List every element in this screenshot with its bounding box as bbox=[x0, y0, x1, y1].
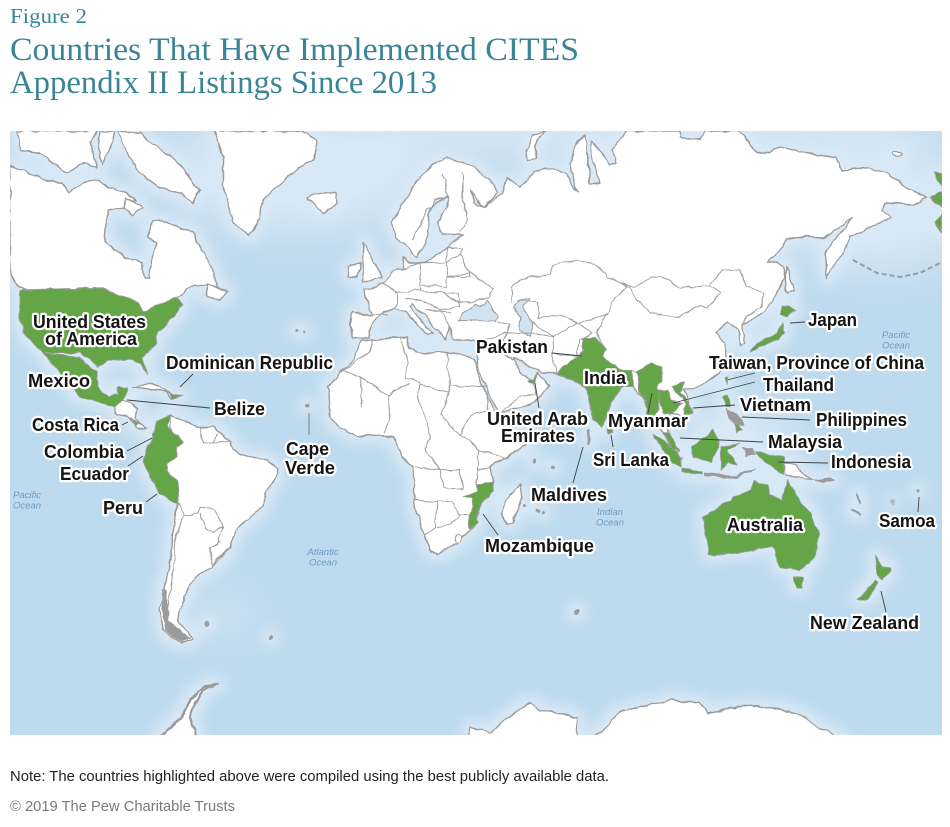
title block bbox=[10, 4, 579, 101]
Vietnam bbox=[672, 383, 692, 416]
Japan bbox=[780, 305, 795, 317]
Caspian Sea bbox=[513, 298, 533, 337]
label: Australia: Australia bbox=[727, 514, 804, 535]
label: United States of America: United States bbox=[33, 311, 146, 332]
Central America bbox=[113, 400, 147, 428]
label: Pakistan: Pakistan bbox=[476, 336, 548, 357]
title line two: Appendix II Listings Since 2013 bbox=[10, 65, 437, 101]
Indian Ocean: Indian bbox=[597, 507, 623, 518]
label: Emirates: Emirates bbox=[501, 425, 575, 446]
Greenland bbox=[215, 131, 317, 235]
label: Mozambique: Mozambique bbox=[485, 535, 594, 556]
leader lines bbox=[122, 322, 919, 612]
Mozambique bbox=[463, 482, 494, 528]
label: Dominican Republic: Dominican Republic bbox=[166, 352, 333, 373]
label: India: India bbox=[584, 367, 627, 388]
label: Philippines: Philippines bbox=[816, 409, 907, 430]
label: Costa Rica: Costa Rica bbox=[32, 414, 120, 435]
South America bbox=[144, 415, 277, 643]
country borders bbox=[167, 173, 765, 610]
Caribbean islands bbox=[133, 383, 170, 392]
label: Mexico: Mexico bbox=[28, 370, 90, 391]
Dominican Republic bbox=[170, 393, 182, 398]
label: Verde: Verde bbox=[285, 457, 335, 478]
Africa bbox=[328, 337, 530, 555]
label: Belize: Belize bbox=[214, 398, 265, 419]
Myanmar bbox=[637, 363, 662, 420]
Papua New Guinea bbox=[783, 462, 812, 480]
Far-side Pacific highlights bbox=[933, 173, 942, 185]
label: Indonesia: Indonesia bbox=[831, 451, 912, 472]
Thailand bbox=[658, 390, 682, 413]
Colombia, Ecuador and Peru bbox=[144, 415, 183, 503]
Philippines bbox=[723, 395, 730, 407]
land: uncoloured countries bbox=[10, 131, 927, 742]
Antarctica bbox=[590, 700, 845, 742]
label: Myanmar: Myanmar bbox=[608, 410, 688, 431]
Pacific Ocean west: Ocean bbox=[13, 500, 41, 512]
UK and Ireland bbox=[362, 243, 382, 283]
Novaya Zemlya bbox=[527, 131, 545, 160]
Aleutian Islands bbox=[853, 260, 942, 277]
label: Vietnam: Vietnam bbox=[740, 394, 811, 415]
label: Ecuador: Ecuador bbox=[60, 463, 129, 484]
label: of America: of America bbox=[45, 328, 138, 349]
land and countries bbox=[10, 131, 942, 742]
Eurasia bbox=[350, 131, 927, 452]
label: Colombia: Colombia bbox=[44, 441, 125, 462]
Madagascar bbox=[502, 485, 522, 525]
Canada and Alaska bbox=[10, 166, 217, 313]
United Arab Emirates bbox=[527, 374, 538, 384]
Black Sea bbox=[458, 300, 497, 322]
world map bbox=[10, 105, 950, 742]
Australia bbox=[703, 480, 820, 570]
Costa Rica bbox=[130, 418, 140, 425]
Arctic islands bbox=[118, 131, 200, 203]
Iceland bbox=[307, 193, 338, 213]
note: Note: The countries highlighted above were compiled using the best publicly available data. bbox=[10, 769, 609, 785]
label: New Zealand: New Zealand bbox=[810, 612, 919, 633]
inland water bbox=[458, 298, 533, 337]
label: United Arab: United Arab bbox=[487, 408, 588, 429]
New Zealand bbox=[875, 555, 891, 580]
label: Sri Lanka: Sri Lanka bbox=[593, 449, 670, 470]
label: Cape: Cape bbox=[286, 438, 329, 459]
label: Malaysia: Malaysia bbox=[768, 431, 843, 452]
label: Taiwan, Province of China: Taiwan, Province of China bbox=[709, 352, 925, 373]
Pacific Ocean east: Pacific bbox=[882, 330, 910, 341]
Pacific Ocean east: Ocean bbox=[882, 340, 910, 352]
ocean labels bbox=[13, 330, 910, 568]
label: Japan: Japan bbox=[808, 309, 857, 330]
Sri Lanka bbox=[607, 428, 613, 433]
United States bbox=[20, 288, 183, 375]
highlighted countries bbox=[20, 173, 942, 600]
Sakhalin bbox=[785, 267, 793, 293]
copyright: © 2019 The Pew Charitable Trusts bbox=[10, 799, 235, 815]
title line one: Countries That Have Implemented CITES bbox=[10, 32, 579, 68]
country labels bbox=[28, 309, 936, 633]
label: Thailand: Thailand bbox=[763, 374, 834, 395]
label: Peru: Peru bbox=[103, 497, 143, 518]
Taiwan bbox=[725, 377, 728, 385]
Pacific Ocean west: Pacific bbox=[13, 490, 41, 501]
Atlantic Ocean: Ocean bbox=[309, 558, 337, 568]
Indonesia and Malaysia bbox=[652, 435, 682, 467]
India and Pakistan bbox=[557, 337, 633, 427]
Mexico bbox=[43, 353, 128, 407]
label: Samoa: Samoa bbox=[879, 510, 936, 531]
figure number: Figure 2 bbox=[10, 4, 87, 28]
Atlantic Ocean: Atlantic bbox=[307, 547, 339, 558]
Indian Ocean: Ocean bbox=[596, 518, 624, 528]
small islands bbox=[161, 328, 918, 642]
label: Maldives: Maldives bbox=[531, 484, 607, 505]
Wrangel Island bbox=[892, 152, 902, 156]
